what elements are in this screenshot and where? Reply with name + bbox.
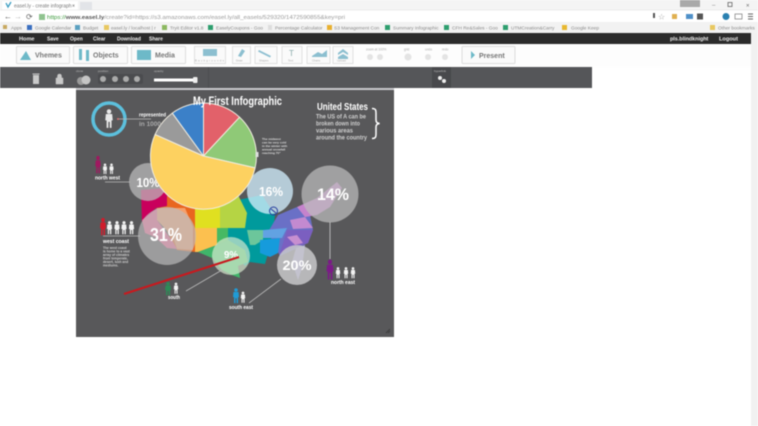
circle: 14%: [302, 166, 358, 222]
infographic canvas: [76, 90, 394, 337]
group: west coast: [100, 218, 140, 268]
hyperlink button: [434, 69, 447, 83]
circle: 31%: 31%: [150, 225, 182, 245]
group: west coast: The west coast: [103, 246, 128, 250]
circle: 16%: [247, 168, 293, 214]
address bar: ←: [4, 12, 12, 21]
text block: pie note: annual snowfall: [262, 148, 285, 152]
text block: pie note: The midwest: [262, 137, 281, 141]
bookmarks bar: CFH Re&Sales - Goo: [452, 26, 498, 32]
browser tab strip: easel.ly - create infograph: [14, 4, 72, 10]
browser tab strip: –: [712, 3, 716, 9]
circle: 20%: [277, 245, 317, 285]
app toolbar: Backgrounds: [195, 58, 225, 62]
group: west coast: array of climates: [103, 253, 129, 257]
bookmarks bar: UTMCreation&Carry: [511, 26, 555, 32]
zoom / grid / undo controls: zoom at 100%: [366, 48, 387, 52]
text block: US description: The US of A can be: [316, 114, 366, 120]
group: north east: north east: [331, 280, 355, 286]
bookmarks bar: [0, 22, 758, 33]
text block: pie note: can be very cold: [262, 140, 286, 144]
app toolbar: [0, 44, 751, 67]
position buttons: position: [98, 69, 109, 73]
bookmarks bar: Percentage Calculator: [275, 26, 323, 32]
position buttons: [98, 69, 143, 84]
button: media: [132, 46, 186, 64]
text block: US description: [316, 114, 367, 142]
zoom / grid / undo controls: redo: [442, 48, 449, 52]
app menu bar: [0, 33, 751, 44]
app menu bar: Home: [19, 36, 35, 42]
opacity slider: opacity: [154, 69, 164, 73]
app menu bar: Share: [149, 36, 163, 42]
group: south: [165, 270, 222, 301]
tool icons: [203, 49, 348, 59]
pie chart: [150, 103, 256, 209]
resize handle: [386, 329, 390, 333]
circle: 9%: 9%: [224, 250, 238, 261]
bookmarks bar: EaselyCoupons - Goo: [216, 26, 263, 32]
text block: US description: around the country: [316, 134, 367, 142]
icon: lock: [56, 74, 63, 84]
bookmarks bar: Google Calendar: [35, 26, 72, 32]
app toolbar: Charts: [312, 58, 321, 62]
button: objects: [74, 46, 128, 64]
app toolbar: T: [289, 49, 294, 58]
bookmarks bar: Budget: [83, 26, 99, 32]
icon: selection marker: [270, 207, 278, 215]
circle: 16%: 16%: [259, 184, 283, 199]
app toolbar: Shapes: [259, 58, 269, 62]
icon: person in ring: [93, 103, 125, 135]
address bar: https:// www.easel.ly /create?id=https://s3.amazonaws.com/easel.ly/all_easels/529320/1472590855&key=pri: [47, 15, 345, 21]
app menu bar: Open: [70, 36, 83, 42]
group: north west: [95, 156, 130, 182]
title: My First Infographic: [193, 96, 282, 108]
button: themes: Vhemes: [35, 52, 62, 60]
label: represented in 1000: [139, 112, 166, 128]
button: present: Present: [479, 53, 505, 60]
group: west coast: is home to a vast: [103, 250, 131, 254]
text block: pie note: in the winter with: [262, 144, 287, 148]
label: represented in 1000: in 1000: [139, 121, 161, 128]
group: west coast: west coast: [102, 239, 129, 245]
circle: 20%: 20%: [282, 257, 312, 273]
label: represented in 1000: represented: [139, 112, 166, 118]
text block: pie note: [262, 137, 287, 155]
bookmarks bar: Tryit Editor v1.8: [170, 26, 204, 32]
bookmarks bar: Apps: [11, 26, 23, 32]
editing toolbar: [0, 67, 592, 88]
browser tab strip: ×: [746, 4, 750, 10]
button: present: [462, 46, 515, 64]
group: west coast: from temperate,: [103, 256, 128, 260]
text block: US description: various areas: [316, 128, 353, 134]
toggle: [76, 69, 90, 85]
icon: trash: [32, 74, 40, 84]
group: north west: north west: [95, 176, 120, 182]
browser tab strip: ×: [72, 4, 75, 10]
opacity slider: [154, 69, 198, 83]
button: media: Media: [155, 52, 175, 60]
address bar: ☆: [658, 12, 665, 22]
zoom / grid / undo controls: undo: [425, 48, 432, 52]
text block: US description: broken down into: [316, 120, 360, 128]
app menu bar: Save: [47, 36, 59, 42]
circle: 14%: 14%: [317, 185, 349, 204]
app menu bar: pls.blindknight: [670, 36, 709, 42]
button: objects: Objects: [93, 52, 119, 60]
app toolbar: Text: [288, 58, 293, 62]
toggle: clone: [76, 69, 84, 73]
group: south: south: [168, 295, 180, 301]
group: west coast: mediums.: [103, 264, 118, 268]
zoom / grid / undo controls: grid: [404, 48, 410, 52]
address bar: [0, 10, 758, 22]
bookmarks bar: easel.ly / localhost | r: [111, 26, 156, 32]
app toolbar: Upload: [337, 58, 346, 62]
bookmarks bar: Google Keep: [571, 26, 599, 32]
address bar: →: [14, 12, 22, 21]
circle: 9%: [212, 237, 250, 275]
circle: 10%: 10%: [136, 176, 160, 190]
circle: 31%: [138, 207, 196, 265]
group: south east: [229, 279, 281, 311]
scrollbar: [751, 33, 758, 426]
browser tab strip: [0, 0, 758, 10]
bookmarks bar: S3 Management Con: [334, 26, 380, 32]
group: north east: [326, 222, 355, 286]
bookmarks bar: Other bookmarks: [718, 26, 755, 32]
button: themes: [16, 46, 70, 64]
heading: United States: United States: [317, 101, 368, 113]
app toolbar: Draw: [236, 58, 244, 62]
group: south east: south east: [229, 305, 253, 311]
address bar: ⟳: [26, 12, 33, 22]
text block: pie note: reaching 70": [262, 151, 281, 155]
group: west coast: desert, lush and: [103, 260, 128, 264]
red line: [124, 257, 239, 294]
brace: [372, 108, 380, 138]
circle: 10%: [129, 163, 167, 201]
app menu bar: Download: [117, 36, 141, 42]
app menu bar: Clear: [93, 36, 106, 42]
zoom / grid / undo controls: [366, 48, 449, 52]
app menu bar: Logout: [719, 36, 738, 42]
US map: [141, 182, 342, 280]
bookmarks bar: Summary Infographic: [393, 26, 439, 32]
leader line: represented: [119, 118, 151, 120]
tool buttons: [194, 46, 353, 64]
hyperlink button: hyperlink: [434, 69, 447, 73]
